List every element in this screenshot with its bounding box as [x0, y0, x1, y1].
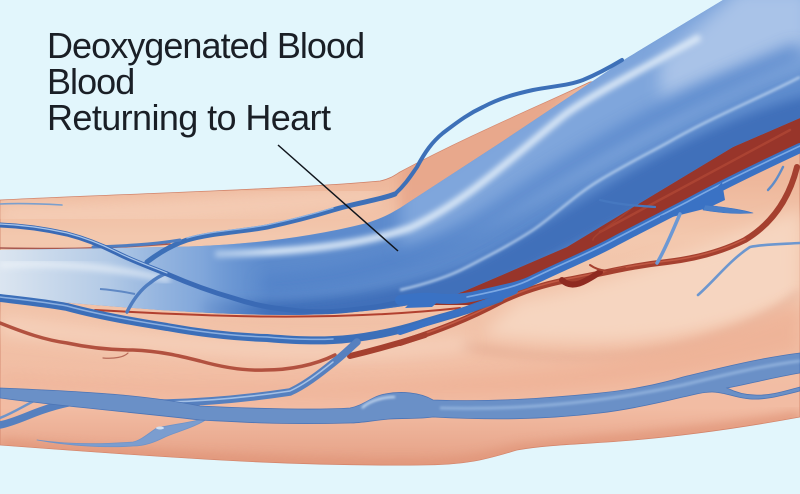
star branches	[660, 182, 725, 220]
title label: Deoxygenated Blood	[47, 25, 364, 66]
vein lower band	[200, 95, 800, 322]
lower main vein	[0, 298, 500, 340]
smaller veins	[0, 60, 800, 447]
upper branch	[395, 60, 622, 194]
lower small vein	[37, 417, 210, 447]
forearm feeder vein	[0, 342, 357, 425]
left pale fade	[0, 244, 260, 314]
large vein	[0, 0, 800, 322]
title label: Returning to Heart	[47, 97, 331, 138]
title label: Blood	[47, 61, 134, 102]
small right veins	[698, 243, 800, 295]
vein upper-right light zone	[400, 0, 800, 250]
skin shading	[0, 70, 800, 465]
junction vein	[400, 148, 800, 300]
long lower vein	[0, 353, 800, 424]
callout line	[278, 145, 398, 251]
highlight thin	[400, 77, 800, 290]
highlight main	[215, 37, 700, 254]
crossing vein	[0, 225, 420, 312]
vein dark mid band	[260, 50, 800, 285]
arteries	[0, 112, 800, 370]
